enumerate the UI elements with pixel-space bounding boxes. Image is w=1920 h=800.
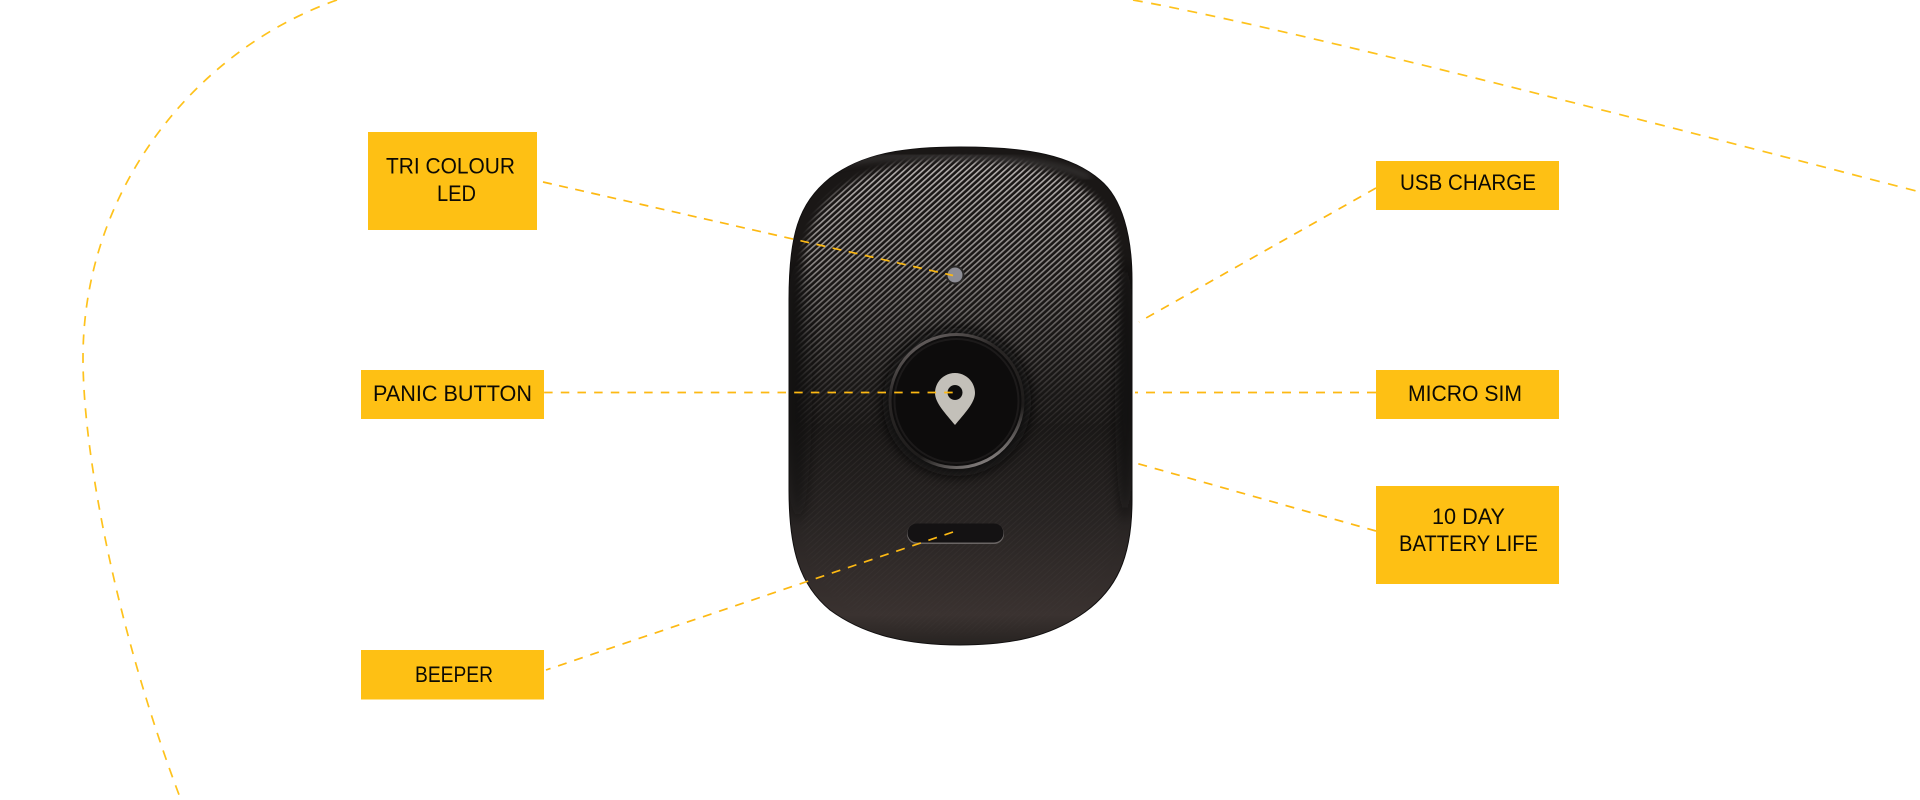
connector: battery life bbox=[1132, 462, 1376, 531]
label: 10 day battery life: BATTERY LIFE bbox=[1399, 531, 1538, 556]
label: panic button bbox=[361, 370, 544, 419]
beeper slot bbox=[907, 524, 1004, 544]
device body bbox=[789, 147, 1132, 645]
label: micro SIM bbox=[1376, 370, 1559, 419]
label: tri colour LED: LED bbox=[437, 181, 476, 206]
label: panic button: PANIC BUTTON bbox=[373, 381, 532, 406]
tri colour LED bbox=[946, 266, 964, 284]
label: beeper bbox=[361, 650, 544, 700]
icon: location pin bbox=[935, 373, 975, 425]
label: tri colour LED: TRI COLOUR bbox=[386, 154, 515, 178]
device textured face bbox=[790, 154, 1132, 514]
connector: micro SIM bbox=[1135, 392, 1376, 394]
connector: panic button bbox=[544, 392, 953, 394]
decorative dashed curve: top right bbox=[1133, 0, 1920, 192]
panic button bbox=[890, 334, 1023, 468]
label: tri colour LED bbox=[368, 132, 537, 230]
connector: USB charge bbox=[1139, 188, 1376, 322]
label: USB charge bbox=[1376, 161, 1559, 210]
label: 10 day battery life: 10 DAY bbox=[1432, 504, 1505, 529]
label: USB charge: USB CHARGE bbox=[1400, 170, 1536, 195]
label: micro SIM: MICRO SIM bbox=[1408, 381, 1522, 406]
connector: tri colour LED bbox=[543, 182, 953, 276]
label: 10 day battery life bbox=[1376, 486, 1559, 584]
decorative dashed curve: left bbox=[83, 0, 337, 800]
connector: beeper bbox=[546, 532, 953, 670]
label: beeper: BEEPER bbox=[415, 662, 493, 687]
device bbox=[788, 146, 1132, 646]
